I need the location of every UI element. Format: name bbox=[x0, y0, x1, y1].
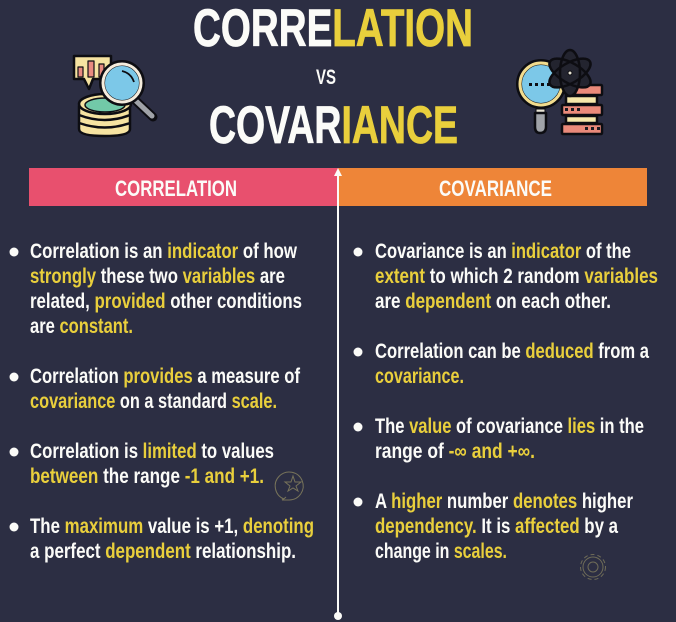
title: correlation: CORRELATION bbox=[193, 0, 473, 58]
point 4 bbox=[354, 490, 633, 563]
point 4 bbox=[10, 515, 314, 563]
point 2: Correlation provides a measure of bbox=[30, 365, 301, 388]
point 4: change in scales. bbox=[375, 540, 507, 563]
header bar: covariance: COVARIANCE bbox=[439, 176, 552, 201]
center divider arrow bbox=[334, 168, 342, 620]
point 1: strongly these two variables are bbox=[30, 265, 285, 288]
point 3 bbox=[354, 415, 644, 463]
point 1: Covariance is an indicator of the bbox=[375, 240, 631, 263]
point 3: Correlation is limited to values bbox=[30, 440, 274, 463]
point 1 bbox=[354, 240, 658, 313]
point 4: a perfect dependent relationship. bbox=[30, 540, 296, 563]
point 4: A higher number denotes higher bbox=[375, 490, 633, 513]
panel: covariance points bbox=[354, 240, 658, 563]
icon: faint star speech bubble bbox=[275, 472, 303, 500]
point 3: range of -∞ and +∞. bbox=[375, 440, 535, 463]
point 2: covariance. bbox=[375, 365, 464, 388]
point 1: extent to which 2 random variables bbox=[375, 265, 658, 288]
icon: magnifier with atom and server stack bbox=[519, 50, 602, 134]
point 3 bbox=[10, 440, 274, 488]
point 4: dependency. It is affected by a bbox=[375, 515, 618, 538]
icon: faint gear bbox=[580, 554, 606, 580]
point 4: The maximum value is +1, denoting bbox=[30, 515, 314, 538]
point 1: related, provided other conditions bbox=[30, 290, 302, 313]
point 2 bbox=[354, 340, 649, 388]
panel: correlation points bbox=[10, 240, 314, 563]
header bar: correlation bbox=[29, 168, 338, 206]
header bar: covariance bbox=[338, 168, 647, 206]
point 3: between the range -1 and +1. bbox=[30, 465, 264, 488]
icon: database with magnifier bbox=[74, 56, 153, 136]
title: covariance: COVARIANCE bbox=[209, 96, 458, 155]
point 2 bbox=[10, 365, 301, 413]
point 3: The value of covariance lies in the bbox=[375, 415, 644, 438]
header bar: correlation: CORRELATION bbox=[115, 176, 237, 201]
point 1: Correlation is an indicator of how bbox=[30, 240, 298, 263]
title: vs: VS bbox=[316, 66, 336, 89]
point 2: covariance on a standard scale. bbox=[30, 390, 277, 413]
point 1 bbox=[10, 240, 302, 338]
point 2: Correlation can be deduced from a bbox=[375, 340, 649, 363]
point 1: are constant. bbox=[30, 315, 133, 338]
point 1: are dependent on each other. bbox=[375, 290, 611, 313]
